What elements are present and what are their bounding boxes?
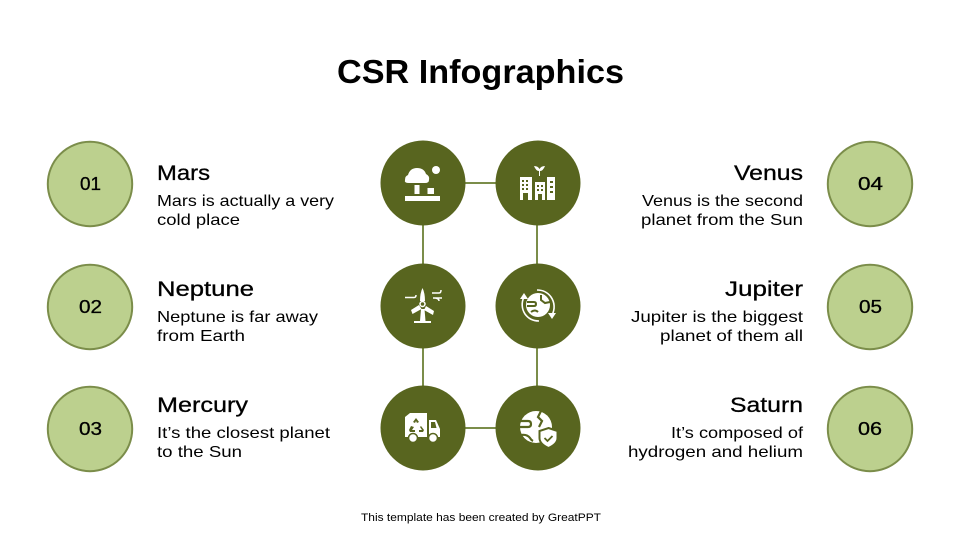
number badge 03: 03 bbox=[79, 418, 102, 439]
number badge 01 bbox=[48, 142, 132, 226]
number badge 05: 05 bbox=[859, 296, 882, 317]
text: Saturn description: It’s composed of bbox=[671, 425, 804, 442]
text: Saturn description bbox=[628, 425, 804, 461]
icon: green building bbox=[496, 140, 580, 226]
text: Venus description: Venus is the second bbox=[642, 193, 803, 210]
panel: item 05 Jupiter bbox=[631, 265, 912, 349]
icon: earth with shield bbox=[496, 386, 580, 470]
icon: wind turbine bbox=[380, 264, 466, 348]
icon: recycling truck bbox=[380, 386, 466, 470]
panel: item 03 Mercury bbox=[48, 387, 331, 471]
heading: Neptune: Neptune bbox=[157, 277, 254, 301]
text: Venus description: planet from the Sun bbox=[641, 212, 803, 229]
icon: tree and sun bbox=[380, 140, 466, 226]
connector lines bbox=[423, 183, 537, 428]
text: Saturn description: hydrogen and helium bbox=[628, 444, 803, 461]
text: Venus description bbox=[641, 193, 803, 229]
text: Neptune description: Neptune is far away bbox=[157, 309, 318, 326]
heading: Venus: Venus bbox=[734, 161, 803, 185]
heading: Saturn: Saturn bbox=[730, 393, 803, 417]
text: Mars description: Mars is actually a very bbox=[157, 193, 334, 210]
heading: Jupiter: Jupiter bbox=[725, 277, 803, 301]
number badge 04: 04 bbox=[858, 173, 883, 194]
panel: item 04 Venus bbox=[641, 142, 912, 229]
panel: item 01 Mars bbox=[48, 142, 334, 229]
text: Mercury description: It’s the closest planet bbox=[157, 425, 331, 442]
text: Neptune description: from Earth bbox=[157, 328, 245, 345]
number badge 03 bbox=[48, 387, 132, 471]
number badge 02 bbox=[48, 265, 132, 349]
icon: recycling earth bbox=[496, 264, 580, 348]
number badge 06 bbox=[828, 387, 912, 471]
footer credit: This template has been created by GreatPPT bbox=[361, 512, 601, 524]
text: Neptune description bbox=[157, 309, 318, 345]
number badge 04 bbox=[828, 142, 912, 226]
number badge 06: 06 bbox=[858, 418, 882, 439]
title: CSR Infographics bbox=[337, 53, 624, 90]
number badge 01: 01 bbox=[80, 173, 101, 194]
text: Mars description bbox=[157, 193, 334, 229]
text: Mercury description: to the Sun bbox=[157, 444, 242, 461]
text: Mercury description bbox=[157, 425, 331, 461]
panel: item 02 Neptune bbox=[48, 265, 318, 349]
text: Jupiter description: planet of them all bbox=[660, 328, 803, 345]
heading: Mars: Mars bbox=[157, 161, 210, 185]
text: Mars description: cold place bbox=[157, 212, 240, 229]
text: Jupiter description: Jupiter is the biggest bbox=[631, 309, 804, 326]
panel: item 06 Saturn bbox=[628, 387, 912, 471]
number badge 05 bbox=[828, 265, 912, 349]
number badge 02: 02 bbox=[79, 296, 102, 317]
text: Jupiter description bbox=[631, 309, 804, 345]
heading: Mercury: Mercury bbox=[157, 393, 248, 417]
